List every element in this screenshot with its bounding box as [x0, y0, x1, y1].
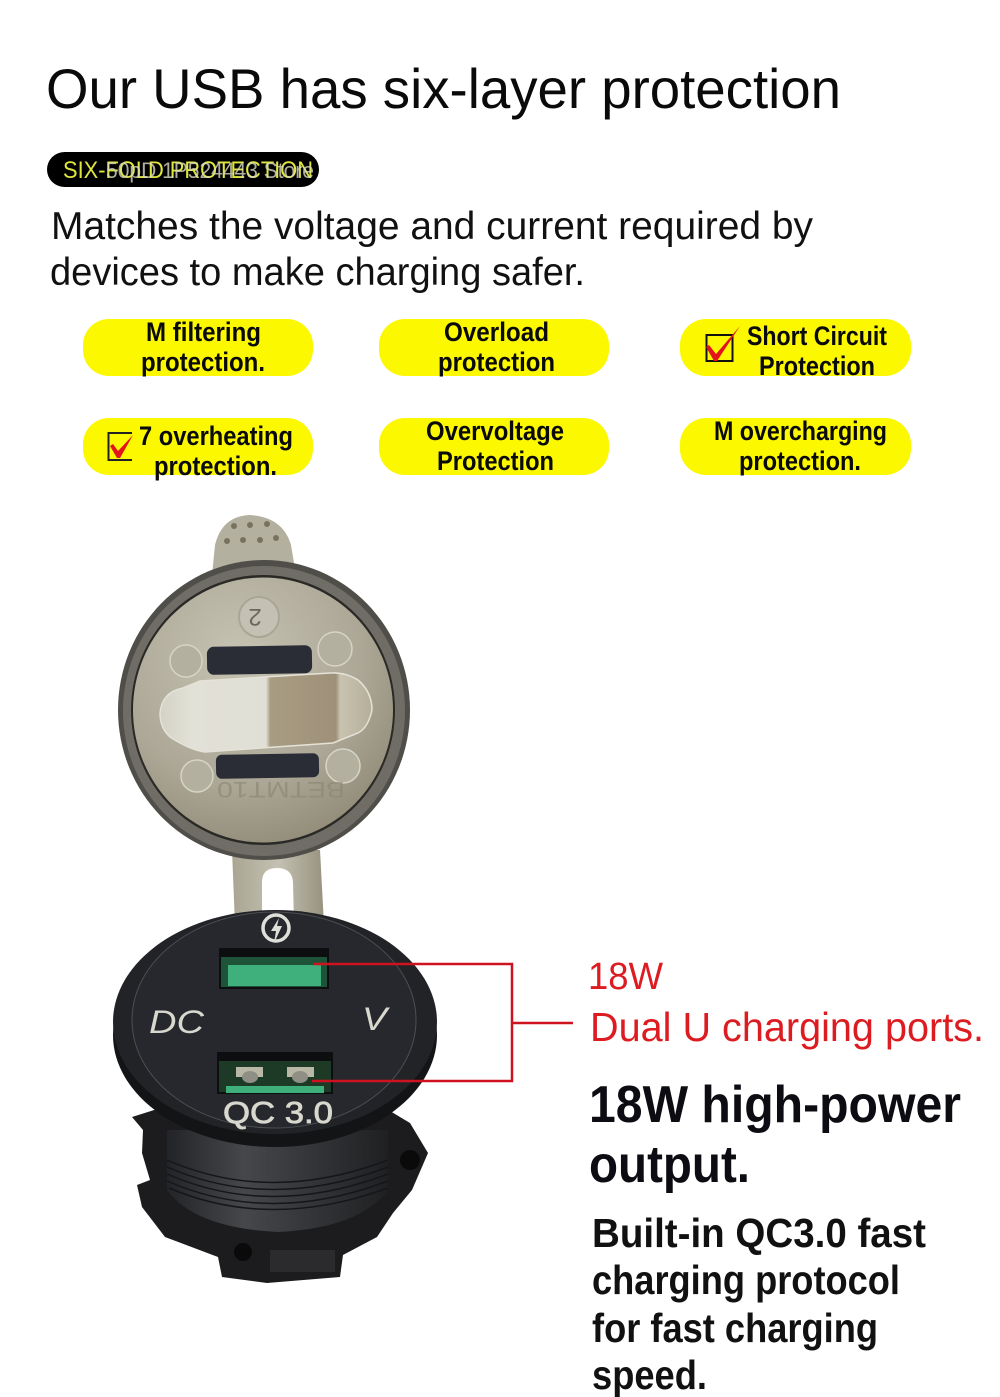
- subtitle text: [50, 205, 813, 294]
- lid rim: [118, 560, 410, 860]
- feature pill: 7 overheating protection: [83, 418, 313, 481]
- feature pill: M overcharging protection: [680, 416, 911, 476]
- feature pill: M filtering protection: M filtering: [146, 317, 261, 347]
- tether top tab with dots: [212, 515, 296, 575]
- photo: USB charger body: [113, 910, 437, 1283]
- feature pill: Overload protection: [379, 317, 609, 377]
- USB port bottom: [217, 1052, 333, 1094]
- description text: Built-in QC3.0 fast: [592, 1210, 926, 1256]
- thread: [167, 1130, 388, 1232]
- badge: overlapping labels: 50pD 1P524443 Store: [106, 158, 314, 183]
- USB port top: [219, 948, 329, 989]
- title: Our USB has six-layer protection: [46, 57, 841, 120]
- lid inner face: [133, 578, 393, 842]
- embossed lid lettering: BETMT10: [217, 777, 345, 802]
- icon: quick charge logo: [263, 915, 289, 943]
- red callout label: Dual U charging ports.: [590, 1004, 984, 1050]
- feature pill: Short Circuit Protection: Short Circuit: [747, 321, 887, 351]
- badge: overlapping labels: SIX-FOLD PROTECTION: [63, 157, 313, 184]
- mounting circles: [170, 632, 360, 792]
- red callout label: [588, 956, 984, 1050]
- subtitle text: devices to make charging safer.: [50, 251, 585, 294]
- feature pill: Short Circuit Protection: Protection: [759, 351, 875, 381]
- description text: for fast charging: [592, 1305, 878, 1351]
- feature pill: Overload protection: Overload: [444, 317, 549, 347]
- description text: [592, 1210, 926, 1397]
- feature pill: Overload protection: protection: [438, 347, 555, 377]
- badge: overlapping labels: [47, 152, 319, 187]
- heading: high-power output: output.: [589, 1136, 750, 1194]
- rubber bars: [207, 645, 319, 779]
- feature pill: M overcharging protection: M overcharging: [714, 416, 887, 446]
- description text: speed.: [592, 1352, 707, 1397]
- nut: [132, 1105, 428, 1283]
- heading: high-power output: 18W high-power: [589, 1076, 961, 1134]
- feature pill: Overvoltage Protection: Protection: [437, 446, 554, 476]
- nut notches: [234, 1150, 420, 1272]
- subtitle text: Matches the voltage and current required by: [51, 205, 813, 248]
- embossed number circle: 2: [248, 603, 262, 630]
- central slot: [160, 673, 372, 752]
- embossed number circle: [239, 597, 279, 637]
- feature pill: Overvoltage Protection: [379, 416, 609, 476]
- feature pill: Overvoltage Protection: Overvoltage: [426, 416, 564, 446]
- heading: high-power output: [589, 1076, 961, 1194]
- feature pill: M filtering protection: protection.: [141, 347, 265, 377]
- feature pill: 7 overheating protection: 7 overheating: [139, 421, 293, 451]
- bezel top: [113, 910, 437, 1134]
- feature pill: M overcharging protection: protection.: [739, 446, 861, 476]
- photo: USB charger body: QC 3.0: [223, 1095, 333, 1130]
- feature pill: M filtering protection: [83, 317, 313, 377]
- printed labels: DC: [149, 1004, 205, 1040]
- photo: USB charger body: V: [362, 1001, 390, 1037]
- icon: checkbox with red tick: [108, 433, 133, 460]
- tether bottom tab: [232, 850, 324, 925]
- description text: charging protocol: [592, 1257, 900, 1303]
- bezel side: [113, 923, 437, 1147]
- feature pill: Short Circuit Protection: [680, 319, 911, 381]
- icon: checkbox with red tick: [706, 326, 740, 361]
- red callout label: 18W: [588, 956, 663, 998]
- feature pill: 7 overheating protection: protection.: [154, 451, 277, 481]
- photo: USB charger lid: [118, 515, 410, 925]
- bracket connector lines: [312, 964, 573, 1081]
